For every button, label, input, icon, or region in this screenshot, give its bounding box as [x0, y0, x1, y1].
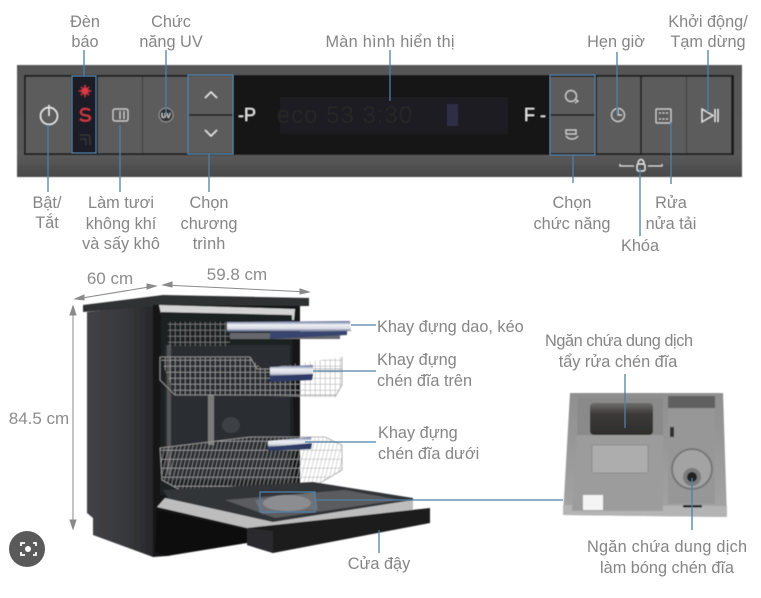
buttons: program up down	[189, 76, 233, 153]
label: refresh and dry: không khí	[86, 215, 157, 233]
label: door: Cửa đậy	[348, 555, 411, 573]
icon: lens badge	[9, 531, 45, 567]
label: refresh and dry: Làm tươi	[88, 194, 154, 212]
button: start pause	[687, 77, 731, 153]
side panel	[87, 305, 153, 557]
front frame	[153, 305, 300, 557]
top	[83, 295, 309, 312]
label: choose program: chương	[181, 215, 237, 233]
label: rinse aid: Ngăn chứa dung dịch	[587, 538, 747, 556]
label: start pause: Khởi động/	[668, 13, 748, 31]
gasket	[159, 305, 295, 320]
icon: lock	[620, 160, 662, 171]
label: display: Màn hình hiển thị	[326, 33, 454, 51]
label: height: 84.5 cm	[9, 409, 69, 428]
label: indicator: báo	[71, 33, 99, 51]
button: timer	[597, 77, 640, 153]
display readout: eco 53 3:30	[277, 102, 413, 129]
lower rack	[160, 437, 342, 495]
dispenser	[563, 393, 727, 517]
dimension arrows	[70, 282, 309, 529]
door underside	[155, 510, 247, 556]
door front	[247, 508, 430, 553]
label: choose program: trình	[193, 235, 225, 253]
label: upper rack: chén đĩa trên	[377, 372, 472, 390]
label: choose function: Chọn	[553, 194, 591, 212]
door rim	[157, 498, 413, 531]
button: half load	[642, 77, 686, 153]
label: lock: Khóa	[621, 237, 660, 255]
indicator lights	[72, 76, 96, 153]
label: timer: Hẹn giờ	[587, 33, 645, 51]
label: half load: Rửa	[655, 194, 687, 212]
label: F: F -	[524, 105, 546, 125]
dishwasher leader lines	[305, 325, 563, 553]
label: detergent: Ngăn chứa dung dịch	[545, 332, 693, 350]
dispenser leader lines	[625, 374, 692, 530]
label: UV: Chức	[151, 13, 191, 31]
label: power: Bật/	[33, 194, 61, 212]
panel: control panel	[17, 65, 742, 177]
button: air refresh and dry	[98, 77, 142, 153]
upper rack	[160, 357, 342, 397]
callout boxes and leader lines	[48, 50, 708, 236]
label: indicator: Đèn	[70, 13, 100, 31]
button: power	[26, 77, 71, 153]
display readout	[277, 97, 508, 134]
blue highlight: dispenser on door	[260, 492, 315, 512]
label: choose program: Chọn	[190, 194, 228, 212]
cavity	[160, 312, 295, 500]
label: detergent second line: tẩy rửa chén đĩa	[559, 353, 678, 371]
door interior	[163, 482, 413, 526]
label: P: -P	[238, 105, 256, 125]
top labels	[70, 13, 748, 51]
bottom labels	[33, 194, 696, 255]
label: depth: 60 cm	[87, 269, 133, 288]
label: lower rack: chén đĩa dưới	[378, 445, 479, 463]
label: width: 59.8 cm	[207, 265, 267, 284]
label: half load: nửa tải	[646, 215, 696, 233]
dishwasher	[83, 295, 430, 557]
label: start pause: Tạm dừng	[670, 33, 746, 51]
label: refresh and dry: và sấy khô	[82, 235, 160, 253]
label: UV: năng UV	[139, 33, 203, 51]
label: lower rack: Khay đựng	[378, 424, 458, 442]
buttons: function	[550, 77, 595, 153]
label: choose function: chức năng	[534, 215, 610, 233]
label: upper rack: Khay đựng	[377, 351, 457, 369]
label: rinse aid second line: làm bóng chén đĩa	[600, 559, 735, 577]
label: cutlery tray: Khay đựng dao, kéo	[377, 318, 524, 336]
label: power: Tắt	[35, 213, 59, 232]
button: UV	[143, 77, 189, 153]
top tray	[168, 321, 351, 346]
button: UV: UV	[161, 113, 171, 120]
